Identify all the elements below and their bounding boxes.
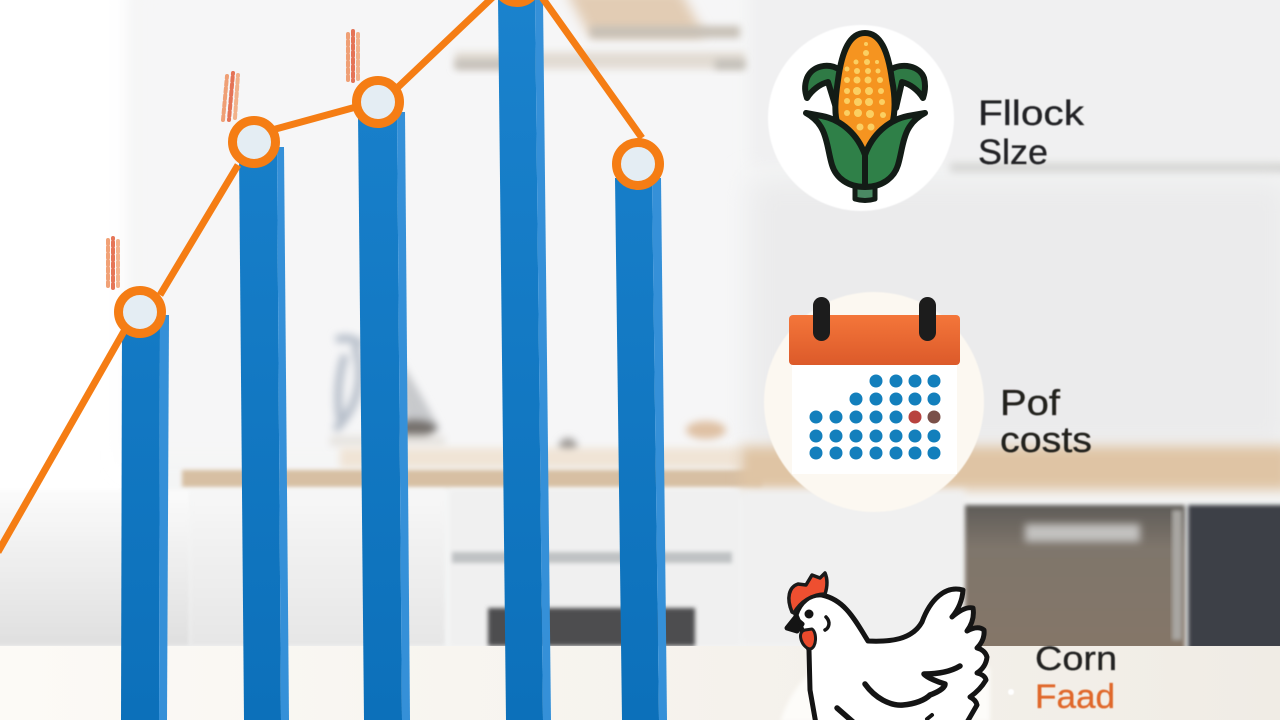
icon: corn (805, 33, 925, 200)
bar 2 (239, 147, 289, 720)
icon background circle (764, 292, 984, 512)
panel: calendar icon (764, 292, 1092, 512)
panel: corn icon (768, 25, 1085, 211)
garbled data label 3 (348, 31, 358, 81)
bar 4 (498, 0, 551, 720)
label: flock size: Slze (978, 133, 1048, 172)
panel: chicken icon (780, 573, 1117, 720)
label: pof costs: Pof (1000, 382, 1061, 423)
data point markers (118, 0, 660, 334)
trend line (0, 0, 642, 552)
garbled data label 1 (108, 238, 118, 290)
icon: calendar (789, 297, 960, 474)
icon background circle (768, 25, 954, 211)
bar 1 (121, 315, 169, 720)
label: pof costs: costs (1000, 419, 1092, 460)
bar chart with trend line (0, 0, 667, 720)
bar 3 (358, 112, 410, 720)
label: corn feed (1035, 640, 1117, 716)
icon: chicken (787, 573, 987, 720)
icon background glow (780, 668, 990, 720)
label: flock size: Fllock (978, 94, 1085, 133)
label: pof costs (1000, 382, 1092, 460)
label: corn feed: Corn (1035, 640, 1117, 678)
label: flock size (978, 94, 1085, 172)
garbled data label 2 (223, 73, 238, 120)
bar 5 (615, 178, 667, 720)
small highlight dot (1008, 689, 1014, 695)
label: corn feed: Faad (1035, 678, 1115, 716)
